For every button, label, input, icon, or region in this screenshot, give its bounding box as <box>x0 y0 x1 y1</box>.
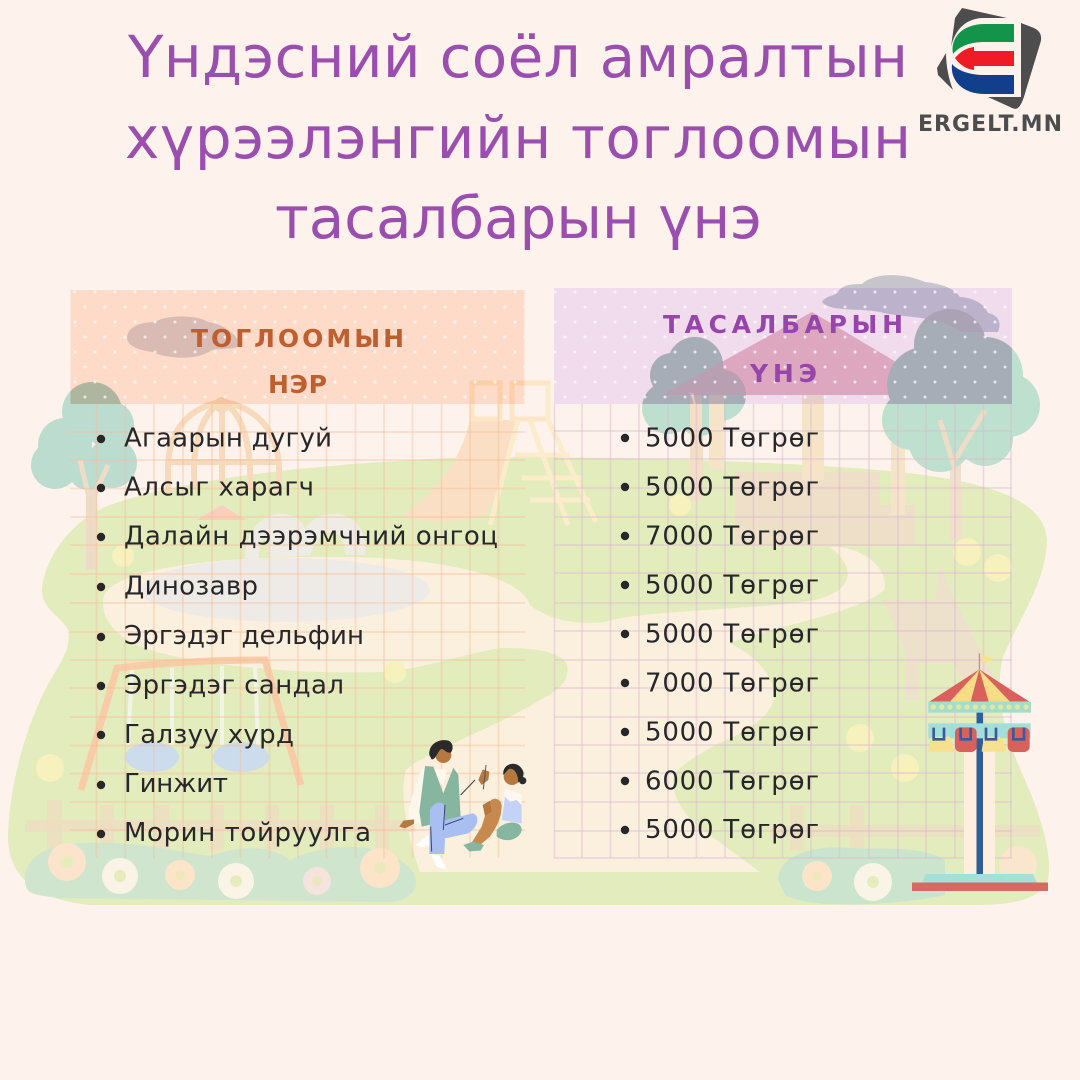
panel: ticket price table <box>554 288 1040 858</box>
list: prices <box>621 424 819 845</box>
list: prices: 5000 Төгрөг <box>645 570 819 600</box>
title: Үндэсний соёл амралтын <box>127 23 908 91</box>
list: game names <box>97 424 498 848</box>
small yellow flowers <box>36 494 1012 782</box>
title: хүрээлэнгийн тоглоомын <box>125 104 911 172</box>
list: game names: Далайн дээрэмчний онгоц <box>124 522 498 552</box>
list: game names: Галзуу хурд <box>124 720 294 750</box>
list: prices: 5000 Төгрөг <box>645 472 819 502</box>
logo: ERGELT.MN <box>918 8 1062 137</box>
list: game names: Морин тойруулга <box>124 818 371 848</box>
dome climber <box>166 400 281 495</box>
title: тасалбарын үнэ <box>275 184 762 252</box>
tower pole <box>964 750 995 875</box>
heading: game name: ТОГЛООМЫН <box>191 324 404 353</box>
canopy roof <box>929 669 1029 702</box>
green lawn <box>8 457 1049 905</box>
list: game names: Агаарын дугуй <box>124 424 332 454</box>
left tree <box>31 382 137 570</box>
bushes with flowers <box>25 842 1037 904</box>
cream path and lagoon <box>103 547 885 872</box>
swan boat <box>245 514 365 560</box>
list: prices: 5000 Төгрөг <box>645 815 819 845</box>
list: prices: 6000 Төгрөг <box>645 766 819 796</box>
tower base <box>922 874 1037 883</box>
flag <box>979 653 995 670</box>
list: game names: Динозавр <box>124 572 258 602</box>
pond <box>140 558 430 622</box>
list: game names: Эргэдэг дельфин <box>124 621 364 651</box>
list: game names: Алсыг харагч <box>124 472 314 502</box>
heading: game name: НЭР <box>268 370 327 399</box>
header band: game name <box>70 290 524 404</box>
header band: ticket price <box>554 288 1012 404</box>
swing set <box>81 660 301 790</box>
list: prices: 5000 Төгрөг <box>645 424 819 454</box>
left tree behind gazebo <box>642 337 746 490</box>
heading: ticket price: ТАСАЛБАРЫН <box>663 310 903 339</box>
heading: game name <box>191 324 404 399</box>
right cloud <box>822 275 1000 332</box>
faded playground background scene <box>8 275 1049 905</box>
list: prices: 7000 Төгрөг <box>645 522 819 552</box>
panel: game name table <box>62 290 525 858</box>
list: prices: 7000 Төгрөг <box>645 668 819 698</box>
spring rider <box>196 505 246 520</box>
logo wordmark: ERGELT.MN <box>918 112 1062 137</box>
left cloud <box>127 316 240 358</box>
illustration: carousel swing tower <box>912 653 1048 891</box>
heading: ticket price: ҮНЭ <box>749 359 817 388</box>
gazebo <box>662 312 915 545</box>
left fence <box>25 800 415 850</box>
right fence <box>770 805 1040 850</box>
illustration: woman and girl sitting <box>399 740 526 869</box>
title <box>125 23 911 252</box>
slide and ladder <box>403 383 596 525</box>
list: game names: Эргэдэг сандал <box>124 670 344 700</box>
woman <box>399 740 489 869</box>
list: prices: 5000 Төгрөг <box>645 718 819 748</box>
seats <box>928 723 1031 752</box>
list: game names: Гинжит <box>124 769 228 799</box>
right big tree <box>882 309 1040 540</box>
list: prices: 5000 Төгрөг <box>645 620 819 650</box>
heading: ticket price <box>663 310 903 388</box>
girl <box>463 764 526 851</box>
park bench <box>883 565 1000 700</box>
canopy trim <box>928 702 1031 713</box>
